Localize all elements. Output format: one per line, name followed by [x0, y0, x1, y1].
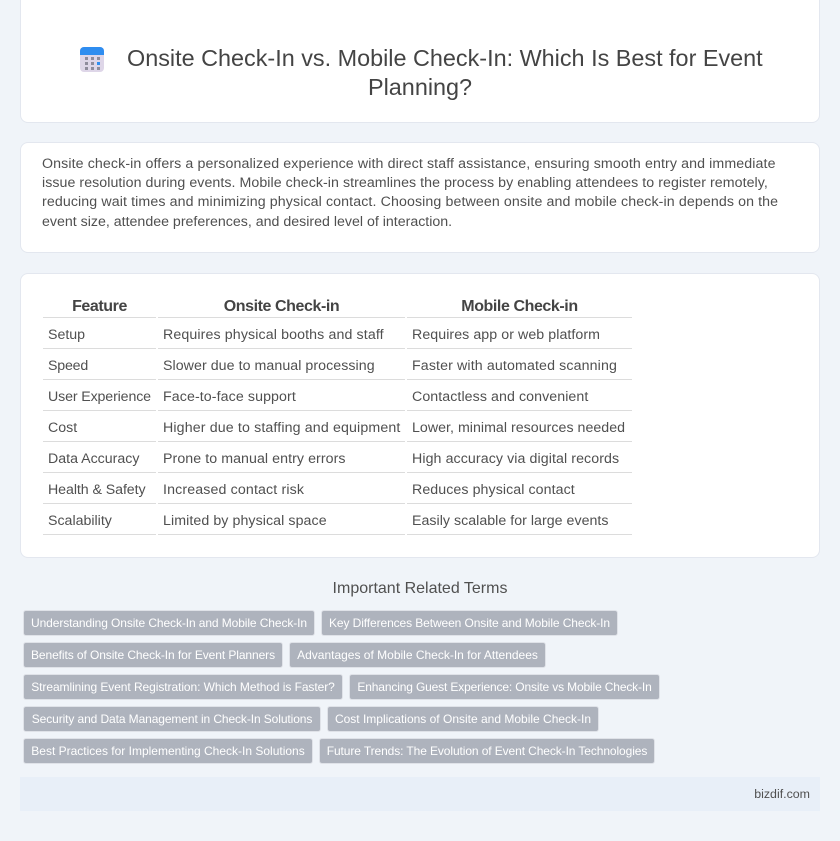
tag [319, 738, 655, 764]
tag [289, 642, 546, 668]
table row: user experience: Face-to-face support [163, 389, 296, 405]
table row: cost: Cost [48, 420, 77, 436]
tag: Future Trends: The Evolution of Event Check-In Technologies [327, 744, 647, 758]
tag [23, 674, 343, 700]
title: Onsite Check-In vs. Mobile Check-In: Which Is Best for Event [127, 45, 763, 71]
table header: Feature [72, 298, 127, 315]
table header: Onsite Check-in [224, 298, 339, 315]
tag [23, 706, 321, 732]
table row: health and safety: Increased contact risk [163, 482, 304, 498]
tag: Best Practices for Implementing Check-In Solutions [31, 744, 305, 758]
title [127, 45, 763, 100]
footer [20, 777, 820, 811]
table row: data accuracy: Data Accuracy [48, 451, 139, 467]
table row: cost: Lower, minimal resources needed [412, 420, 625, 436]
tag: Enhancing Guest Experience: Onsite vs Mobile Check-In [357, 680, 652, 694]
tag [349, 674, 660, 700]
table row: speed [48, 358, 617, 374]
icon: calendar [80, 47, 104, 72]
text block: introduction: Onsite check-in offers a personalized experience with direct staff assistance, ensuring smooth entry and immediate [42, 156, 776, 172]
tag [23, 610, 315, 636]
tag: Cost Implications of Onsite and Mobile Check-In [335, 712, 591, 726]
table row: data accuracy: Prone to manual entry errors [163, 451, 346, 467]
table row: health and safety: Reduces physical contact [412, 482, 575, 498]
table header: Mobile Check-in [461, 298, 578, 315]
table row: user experience: User Experience [48, 389, 151, 405]
table row: scalability: Scalability [48, 513, 112, 529]
text block: introduction: issue resolution during events. Mobile check-in streamlines the process by enabling attendees to register remotely, [42, 175, 768, 191]
table row: data accuracy: High accuracy via digital records [412, 451, 619, 467]
table row: speed: Faster with automated scanning [412, 358, 617, 374]
table row: cost [48, 420, 625, 436]
text block: introduction: reducing wait times and minimizing physical contact. Choosing between onsite and mobile check-in depends on the [42, 194, 778, 210]
panel: header [20, 0, 820, 123]
table row: health and safety [48, 482, 575, 498]
panel: introduction [20, 142, 820, 253]
panel: comparison table [20, 273, 820, 558]
table row: user experience [48, 389, 588, 405]
table row: cost: Higher due to staffing and equipment [163, 420, 400, 436]
table row: data accuracy [48, 451, 619, 467]
footer source: bizdif.com [754, 787, 810, 801]
title: Planning? [368, 74, 472, 100]
tag [321, 610, 618, 636]
table row: user experience: Contactless and convenient [412, 389, 588, 405]
text block: introduction: event size, attendee preferences, and desired level of interaction. [42, 214, 452, 230]
table row: scalability [48, 513, 609, 529]
tag [327, 706, 599, 732]
related terms tags [23, 610, 660, 764]
table row: speed: Speed [48, 358, 88, 374]
table row: scalability: Limited by physical space [163, 513, 327, 529]
tag: Streamlining Event Registration: Which Method is Faster? [31, 680, 335, 694]
tag [23, 642, 283, 668]
table row: health and safety: Health & Safety [48, 482, 146, 498]
table row: speed: Slower due to manual processing [163, 358, 375, 374]
heading: important related terms: Important Related Terms [333, 580, 507, 597]
tag: Security and Data Management in Check-In Solutions [32, 712, 312, 726]
tag: Advantages of Mobile Check-In for Attendees [297, 648, 538, 662]
text block: introduction [42, 156, 778, 230]
tag: Understanding Onsite Check-In and Mobile Check-In [31, 616, 307, 630]
table row: setup [48, 327, 600, 343]
tag: Benefits of Onsite Check-In for Event Planners [31, 648, 275, 662]
tag: Key Differences Between Onsite and Mobile Check-In [329, 616, 610, 630]
table header [72, 298, 578, 315]
table row: setup: Requires physical booths and staff [163, 327, 384, 343]
tag [23, 738, 313, 764]
table row: setup: Requires app or web platform [412, 327, 600, 343]
table row: setup: Setup [48, 327, 85, 343]
table row: scalability: Easily scalable for large events [412, 513, 609, 529]
